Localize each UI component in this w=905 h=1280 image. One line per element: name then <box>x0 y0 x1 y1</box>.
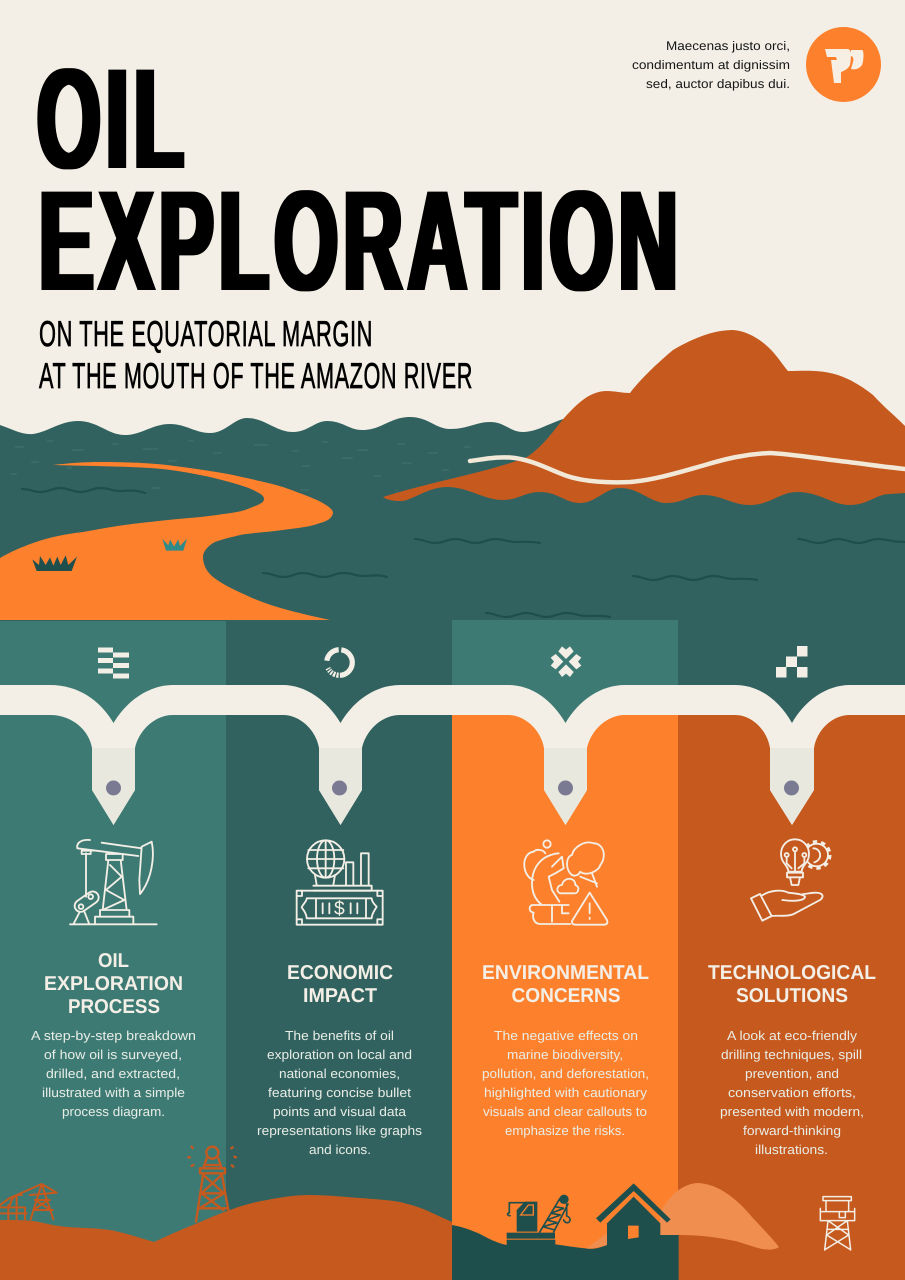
panel: oil exploration process <box>0 621 226 1280</box>
text: economic impact <box>257 962 423 1157</box>
text: environmental concerns: marine biodiversity, <box>507 1047 623 1062</box>
subtitle: ON THE EQUATORIAL MARGIN <box>39 313 373 354</box>
text: technological solutions: TECHNOLOGICAL <box>708 962 876 984</box>
icon: checker blocks <box>776 646 808 678</box>
text: oil exploration process: drilled, and extracted, <box>46 1066 180 1081</box>
text: technological solutions <box>708 962 876 1157</box>
icon: polluted globe <box>524 840 607 925</box>
panel: technological solutions <box>678 621 905 1280</box>
foreground water <box>383 487 905 625</box>
subtitle <box>39 313 473 396</box>
icon: globe and money <box>297 840 383 925</box>
header note: Maecenas justo orci, <box>666 39 790 53</box>
text: oil exploration process: EXPLORATION <box>44 973 183 995</box>
icon: hand and lightbulb <box>751 839 830 921</box>
back water <box>0 417 570 625</box>
icon: pumpjack <box>70 840 157 924</box>
text: environmental concerns: visuals and clear callouts to <box>483 1104 647 1119</box>
icon: orange pylons <box>0 1184 57 1219</box>
text: economic impact: and icons. <box>309 1142 371 1157</box>
text: technological solutions: illustrations. <box>755 1142 828 1157</box>
ground: orange hills <box>0 1195 452 1280</box>
text: economic impact: featuring concise bullet <box>268 1085 411 1100</box>
text: technological solutions: SOLUTIONS <box>736 985 848 1007</box>
text: oil exploration process: OIL <box>98 950 129 972</box>
text: oil exploration process: A step-by-step breakdown <box>31 1028 196 1043</box>
header note: condimentum at dignissim <box>632 58 790 72</box>
text: oil exploration process: illustrated with a simple <box>42 1085 185 1100</box>
text: technological solutions: prevention, and <box>745 1066 839 1081</box>
icon: orange derrick <box>188 1147 236 1222</box>
ground: light hill <box>585 1183 779 1250</box>
title <box>37 40 683 321</box>
pin dots <box>106 780 799 796</box>
water texture <box>11 441 471 496</box>
house window <box>628 1226 639 1239</box>
text: environmental concerns: pollution, and deforestation, <box>482 1066 649 1081</box>
header note: sed, auctor dapibus dui. <box>646 77 790 91</box>
text: economic impact: representations like graphs <box>257 1123 423 1138</box>
river <box>0 462 333 620</box>
text: economic impact: The benefits of oil <box>285 1028 394 1043</box>
text: oil exploration process <box>31 950 196 1119</box>
text: oil exploration process: PROCESS <box>68 996 160 1018</box>
text: environmental concerns: The negative effects on <box>494 1028 638 1043</box>
text: oil exploration process: process diagram. <box>62 1104 165 1119</box>
road <box>470 453 905 482</box>
text: economic impact: exploration on local and <box>267 1047 412 1062</box>
text: technological solutions: presented with modern, <box>720 1104 864 1119</box>
grass tufts <box>32 539 187 571</box>
text: technological solutions: A look at eco-friendly <box>727 1028 858 1043</box>
landscape scene <box>0 330 905 625</box>
text: environmental concerns: emphasize the risks. <box>505 1123 625 1138</box>
panel: environmental concerns <box>452 620 678 1280</box>
pin shading <box>92 748 814 825</box>
text: technological solutions: conservation efforts, <box>728 1085 856 1100</box>
text: oil exploration process: of how oil is surveyed, <box>44 1047 182 1062</box>
icon: globe and money: $ <box>334 897 345 919</box>
text: technological solutions: drilling techniques, spill <box>721 1047 862 1062</box>
text: economic impact: IMPACT <box>303 985 377 1007</box>
text: technological solutions: forward-thinking <box>743 1123 841 1138</box>
ground: dark shore with house <box>452 1183 679 1280</box>
subtitle: AT THE MOUTH OF THE AMAZON RIVER <box>39 355 473 396</box>
crane <box>507 1195 570 1248</box>
icon: cross of hearts <box>551 646 581 677</box>
title: OIL <box>37 40 189 199</box>
text: economic impact: ECONOMIC <box>287 962 393 984</box>
wave marks <box>22 488 905 617</box>
text: environmental concerns <box>482 962 649 1138</box>
text: environmental concerns: highlighted with cautionary <box>484 1085 648 1100</box>
text: environmental concerns: CONCERNS <box>512 985 620 1007</box>
text: economic impact: national economies, <box>279 1066 400 1081</box>
house roof <box>596 1183 671 1223</box>
connector band with pins <box>0 685 905 825</box>
header note <box>632 39 790 91</box>
panel: economic impact <box>226 621 452 1280</box>
icon: stacked bars <box>98 648 129 678</box>
text: environmental concerns: ENVIRONMENTAL <box>482 962 649 984</box>
mountain <box>383 330 905 520</box>
icon: donut <box>325 648 354 677</box>
text: economic impact: points and visual data <box>273 1104 407 1119</box>
logo <box>806 27 881 102</box>
icon: watch tower <box>820 1197 855 1250</box>
